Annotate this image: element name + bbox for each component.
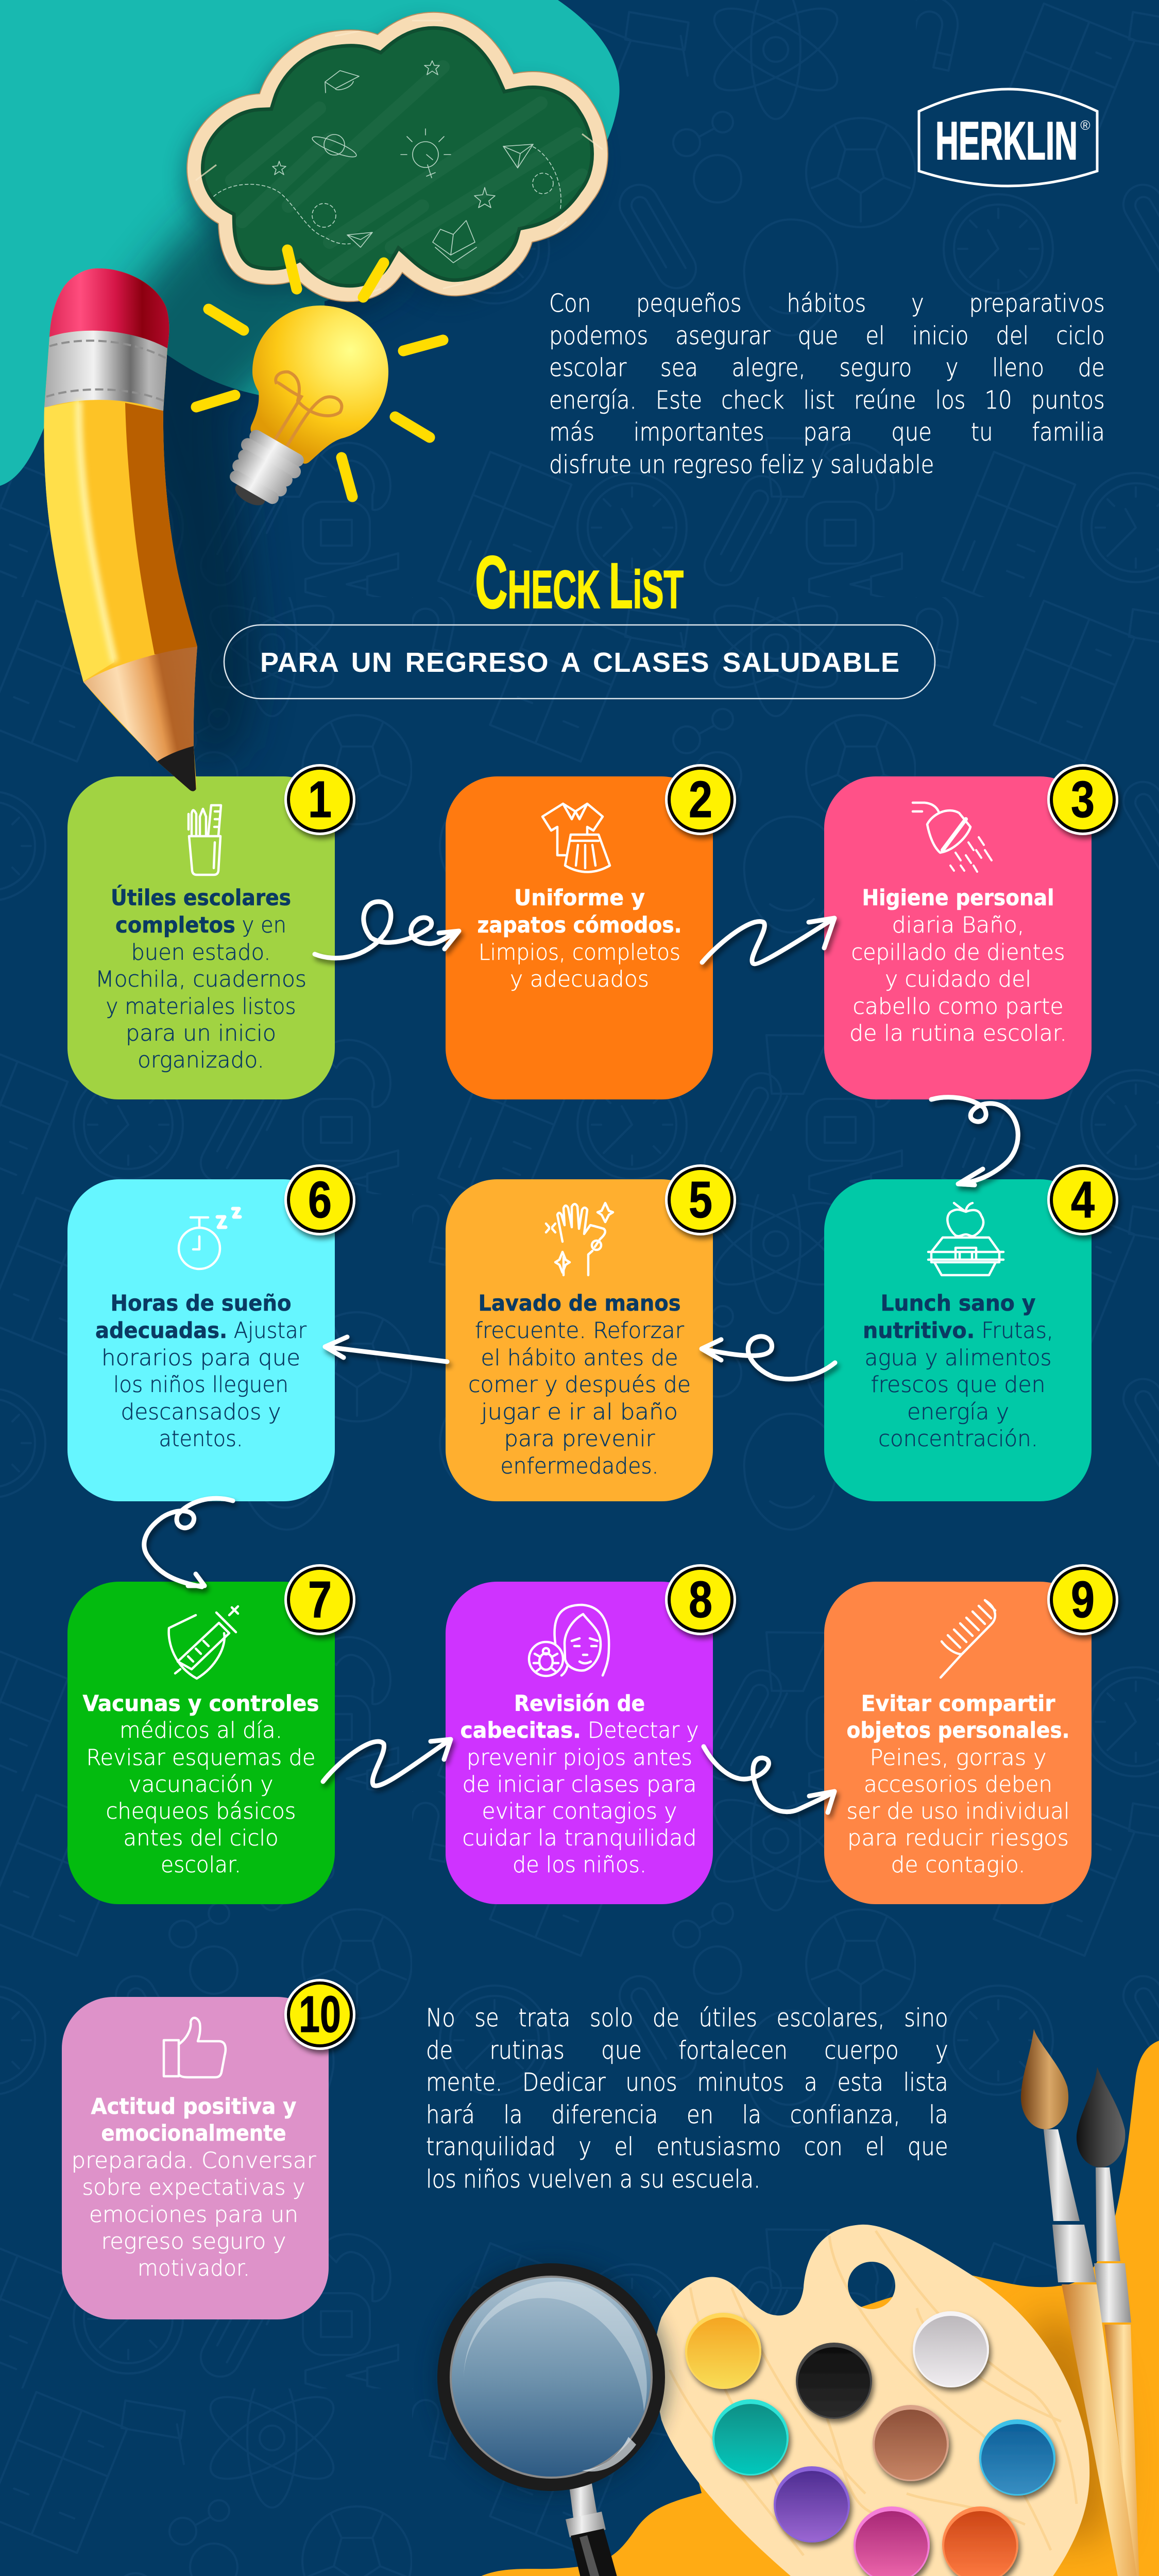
card 5: lavado de manos: frecuente. Reforzar	[475, 1318, 684, 1344]
number badge 3	[1047, 764, 1118, 835]
card 10: actitud positiva: preparada. Conversar	[71, 2148, 316, 2174]
card 7: vacunas: chequeos básicos	[106, 1799, 296, 1824]
card 8: revision de cabecitas: Revisión de	[514, 1691, 645, 1717]
card 10: actitud positiva	[62, 1997, 329, 2319]
light bulb	[217, 306, 388, 518]
number badge 7: 7	[308, 1571, 332, 1629]
intro paragraph: disfrute un regreso feliz y saludable	[549, 450, 934, 479]
number badge 9: 9	[1071, 1571, 1095, 1629]
icon: pencil cup	[189, 805, 221, 875]
card 2: uniforme	[446, 776, 713, 1099]
paint: pink	[854, 2506, 930, 2576]
yellow body	[44, 401, 114, 682]
icon: stopwatch and zzz	[179, 1209, 240, 1269]
card 2: uniforme: zapatos cómodos.	[477, 912, 682, 938]
paint: orange	[942, 2506, 1018, 2576]
card 3: higiene: Higiene personal	[862, 885, 1054, 911]
teal blob	[0, 0, 620, 486]
card 6: horas de sueno: Horas de sueño	[110, 1291, 292, 1316]
card 1: utiles escolares	[67, 776, 335, 1099]
arrow 6 to 7	[144, 1498, 233, 1587]
ferrule	[44, 331, 167, 411]
card 4: lunch: frescos que den	[871, 1372, 1046, 1398]
closing paragraph	[426, 2004, 948, 2194]
number badge 10: 10	[299, 1986, 341, 2043]
number badge 9	[1047, 1564, 1118, 1635]
card 1: utiles escolares: organizado.	[138, 1047, 264, 1073]
icon: comb	[941, 1600, 995, 1677]
number badge 1: 1	[308, 771, 332, 828]
paint: white	[913, 2311, 989, 2387]
card 7: vacunas: vacunación y	[129, 1772, 273, 1798]
card 6: horas de sueno: atentos.	[159, 1426, 243, 1452]
card 6: horas de sueno	[67, 1179, 335, 1501]
intro paragraph	[549, 289, 1105, 479]
closing paragraph: tranquilidad y el entusiasmo con el que	[426, 2132, 948, 2161]
card 7: vacunas: médicos al día.	[120, 1718, 282, 1743]
paint: brown	[873, 2405, 949, 2481]
card 1: utiles escolares: Mochila, cuadernos	[95, 967, 306, 992]
title: check list: CHECK LiST	[475, 540, 684, 624]
card 10: actitud positiva: emociones para un	[89, 2202, 298, 2228]
card 6: horas de sueno: descansados y	[121, 1399, 281, 1425]
arrow 1 to 2	[315, 902, 459, 958]
intro paragraph: más importantes para que tu familia	[549, 418, 1105, 447]
card 8: revision de cabecitas: cabecitas. Detectar y	[461, 1718, 698, 1743]
filament	[273, 372, 342, 451]
palette with paints	[654, 2225, 1113, 2576]
card 7: vacunas: Revisar esquemas de	[87, 1745, 315, 1771]
card 8: revision de cabecitas	[446, 1582, 713, 1904]
subtitle pill: PARA UN REGRESO A CLASES SALUDABLE	[260, 647, 899, 678]
card 3: higiene: diaria Baño,	[892, 912, 1024, 938]
card 7: vacunas: escolar.	[161, 1852, 241, 1878]
paint: yellow	[685, 2313, 761, 2389]
card 4: lunch: concentración.	[878, 1426, 1038, 1452]
icon: shield and syringe	[169, 1606, 238, 1679]
card 7: vacunas: Vacunas y controles	[82, 1691, 319, 1717]
card 10: actitud positiva: motivador.	[138, 2256, 250, 2281]
card 10: actitud positiva: sobre expectativas y	[82, 2175, 305, 2200]
intro paragraph: energía. Este check list reúne los 10 puntos	[549, 385, 1105, 414]
paint: blue	[979, 2419, 1055, 2496]
card 10: actitud positiva: regreso seguro y	[101, 2229, 286, 2255]
card 5: lavado de manos: enfermedades.	[501, 1453, 658, 1479]
card 4: lunch: nutritivo. Frutas,	[863, 1318, 1053, 1344]
magnifying glass	[433, 2259, 670, 2576]
card 3: higiene: y cuidado del	[885, 967, 1031, 992]
card 9: objetos personales	[824, 1582, 1092, 1904]
intro paragraph: Con pequeños hábitos y preparativos	[549, 289, 1105, 318]
icon: shower	[913, 803, 992, 872]
soft shadows	[103, 168, 412, 773]
lead	[157, 746, 196, 793]
number badge 4: 4	[1071, 1171, 1095, 1229]
card 3: higiene: cabello como parte	[853, 994, 1063, 1020]
arrow 7 to 8	[323, 1739, 451, 1786]
arrow 8 to 9	[704, 1747, 834, 1812]
card 5: lavado de manos: el hábito antes de	[481, 1345, 678, 1371]
eraser	[49, 268, 169, 350]
card 9: objetos personales: Evitar compartir	[861, 1691, 1055, 1717]
light rays	[196, 250, 443, 497]
card 8: revision de cabecitas: evitar contagios y	[482, 1799, 677, 1824]
card 8: revision de cabecitas: de los niños.	[513, 1852, 646, 1878]
card 4: lunch: agua y alimentos	[864, 1345, 1052, 1371]
number badge 1	[284, 764, 355, 835]
closing paragraph: hará la diferencia en la confianza, la	[426, 2100, 948, 2129]
card 10: actitud positiva: Actitud positiva y	[91, 2094, 297, 2120]
paint brush brown	[1021, 2029, 1138, 2576]
paint brush dark	[1077, 2067, 1139, 2576]
card 3: higiene	[824, 776, 1092, 1099]
subtitle pill	[224, 625, 935, 699]
pencil	[44, 268, 197, 791]
card 6: horas de sueno: los niños lleguen	[113, 1372, 288, 1398]
card 6: horas de sueno: adecuadas. Ajustar	[95, 1318, 306, 1344]
number badge 10	[284, 1979, 355, 2050]
number badge 8	[665, 1564, 736, 1635]
card 1: utiles escolares: buen estado.	[131, 940, 271, 965]
card 1: utiles escolares: para un inicio	[126, 1021, 276, 1046]
card 4: lunch: energía y	[907, 1399, 1009, 1425]
arrow 3 to 4	[931, 1097, 1018, 1185]
arrow 4 to 5	[702, 1336, 835, 1379]
card 2: uniforme: Limpios, completos	[479, 940, 680, 965]
card 5: lavado de manos: Lavado de manos	[478, 1291, 681, 1316]
number badge 2: 2	[689, 771, 712, 828]
number badge 3: 3	[1071, 771, 1095, 828]
card 1: utiles escolares: Útiles escolares	[111, 885, 291, 911]
card 3: higiene: cepillado de dientes	[851, 940, 1065, 965]
card 9: objetos personales: objetos personales.	[847, 1718, 1069, 1743]
arrow 2 to 3	[702, 918, 834, 964]
number badge 5: 5	[689, 1171, 712, 1229]
number badge 7	[284, 1564, 355, 1635]
card 10: actitud positiva: emocionalmente	[101, 2121, 286, 2146]
card 9: objetos personales: Peines, gorras y	[870, 1745, 1047, 1771]
card 9: objetos personales: de contagio.	[891, 1852, 1025, 1878]
intro paragraph: podemos asegurar que el inicio del ciclo	[549, 321, 1105, 350]
chalkboard	[181, 12, 608, 310]
card 1: utiles escolares: y materiales listos	[106, 994, 296, 1020]
card 8: revision de cabecitas: cuidar la tranquilidad	[463, 1825, 696, 1851]
card 5: lavado de manos: jugar e ir al baño	[481, 1399, 678, 1425]
card 4: lunch	[824, 1179, 1092, 1501]
paint: purple	[774, 2466, 850, 2543]
card 4: lunch: Lunch sano y	[881, 1291, 1035, 1316]
number badge 5	[665, 1164, 736, 1235]
card 7: vacunas: antes del ciclo	[124, 1825, 278, 1851]
closing paragraph: los niños vuelven a su escuela.	[426, 2165, 760, 2194]
card 6: horas de sueno: horarios para que	[101, 1345, 300, 1371]
card 8: revision de cabecitas: prevenir piojos antes	[467, 1745, 692, 1771]
number badge 8: 8	[689, 1571, 712, 1629]
chalk doodles	[214, 61, 561, 263]
card 9: objetos personales: para reducir riesgos	[847, 1825, 1069, 1851]
icon: clean hand	[546, 1203, 613, 1275]
screw base	[217, 426, 309, 518]
number badge 4	[1047, 1164, 1118, 1235]
intro paragraph: escolar sea alegre, seguro y lleno de	[549, 353, 1105, 382]
handle	[566, 2481, 619, 2576]
card 3: higiene: de la rutina escolar.	[849, 1021, 1067, 1046]
brand logo	[919, 89, 1097, 186]
icon: shirt and skirt	[542, 804, 610, 872]
brand logo: ®	[1080, 117, 1090, 133]
number badge 6: 6	[308, 1171, 332, 1229]
card 8: revision de cabecitas: de iniciar clases para	[463, 1772, 696, 1798]
card 9: objetos personales: ser de uso individual	[847, 1799, 1069, 1824]
card 5: lavado de manos: comer y después de	[468, 1372, 691, 1398]
icon: thumbs up	[164, 2018, 226, 2077]
number badge 6	[284, 1164, 355, 1235]
arrow 5 to 6	[325, 1337, 447, 1362]
number badge 2	[665, 764, 736, 835]
card 7: vacunas	[67, 1582, 335, 1904]
paint: teal	[712, 2399, 789, 2476]
paint: black	[796, 2343, 872, 2419]
closing paragraph: No se trata solo de útiles escolares, sino	[426, 2004, 948, 2032]
closing paragraph: mente. Dedicar unos minutos a esta lista	[426, 2068, 948, 2097]
card 9: objetos personales: accesorios deben	[864, 1772, 1052, 1798]
orange blob	[467, 2041, 1159, 2576]
icon: face and louse	[529, 1605, 609, 1676]
card 5: lavado de manos: para prevenir	[504, 1426, 655, 1452]
closing paragraph: de rutinas que fortalecen cuerpo y	[426, 2036, 948, 2065]
card 5: lavado de manos	[446, 1179, 713, 1501]
card 2: uniforme: Uniforme y	[514, 885, 645, 911]
icon: apple and lunch box	[928, 1203, 1003, 1275]
card 1: utiles escolares: completos y en	[115, 912, 286, 938]
card 2: uniforme: y adecuados	[510, 967, 649, 992]
wood tip	[83, 647, 197, 761]
